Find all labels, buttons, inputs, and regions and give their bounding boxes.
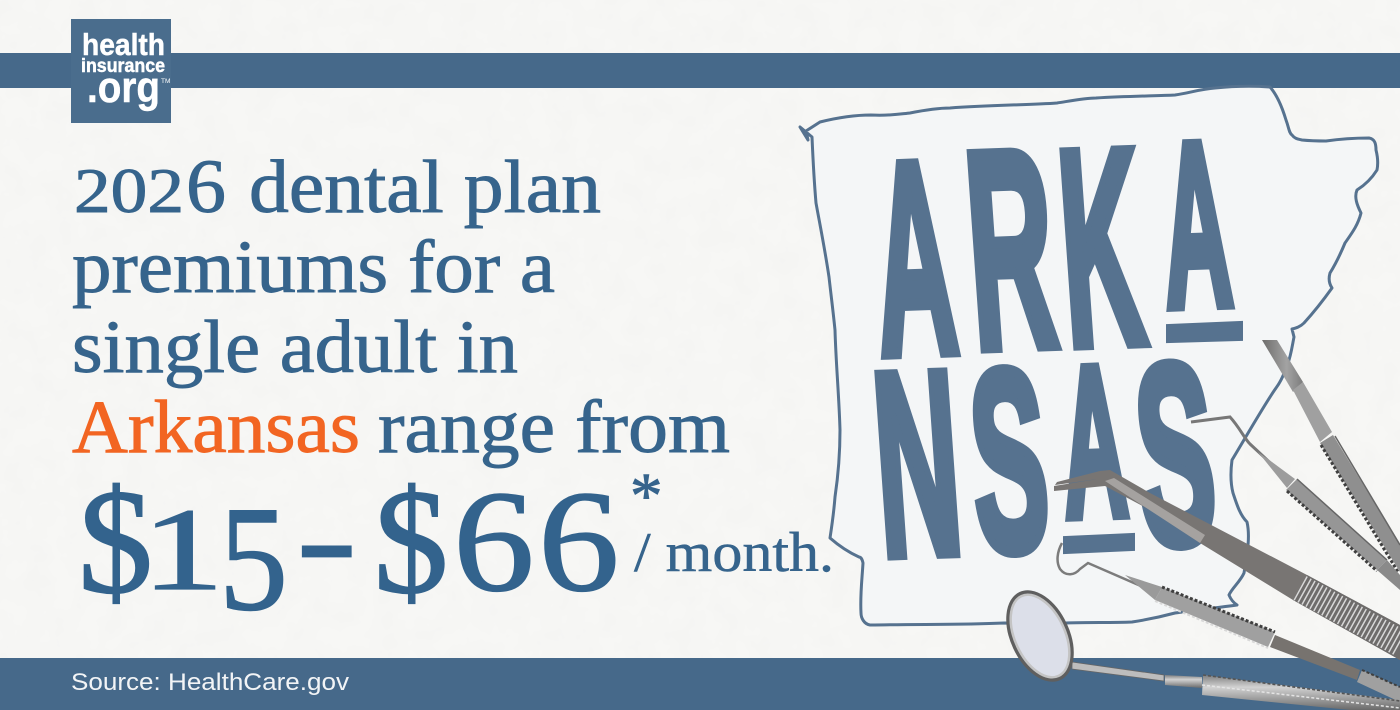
- logo: healthinsurance.org: [71, 19, 171, 123]
- state name lettering: ARKANSAS: A: [1056, 323, 1132, 562]
- price range: $: [374, 459, 448, 625]
- price range: 6: [453, 462, 534, 622]
- state name lettering: ARKANSAS: A: [1156, 93, 1237, 356]
- tool: spatula: [1262, 340, 1400, 572]
- headline: 6: [186, 145, 226, 229]
- price range: –: [302, 419, 352, 641]
- state name lettering: ARKANSAS: K: [1050, 91, 1152, 404]
- price range: $: [78, 459, 153, 625]
- price range: [78, 419, 619, 642]
- tool: dental mirror: [996, 583, 1400, 710]
- price range: 1: [141, 485, 225, 615]
- logo: healthinsurance.org: TM: [161, 78, 170, 85]
- tool: curved probe: [1191, 417, 1400, 590]
- bottom band: [0, 658, 1400, 710]
- headline: Arkansas: [72, 386, 360, 469]
- top band: [0, 53, 1400, 88]
- price range: 5: [219, 477, 288, 642]
- logo: healthinsurance.org: insurance: [81, 55, 165, 77]
- headline: dental plan: [249, 146, 601, 229]
- state name lettering: ARKANSAS: A: [864, 105, 965, 413]
- source line: Source: HealthCare.gov: [71, 669, 349, 696]
- state name lettering: ARKANSAS: S: [962, 317, 1057, 607]
- headline: [72, 145, 730, 469]
- tool: hook probe: [1058, 543, 1400, 702]
- asterisk and per month: [630, 460, 834, 584]
- logo: healthinsurance.org: .org: [87, 63, 160, 112]
- logo: healthinsurance.org: health: [82, 27, 165, 62]
- asterisk and per month: *: [630, 460, 662, 532]
- headline: range from: [378, 386, 730, 469]
- state name lettering: ARKANSAS: [864, 91, 1240, 610]
- dental tools: [996, 340, 1400, 710]
- headline: premiums for a: [72, 226, 555, 309]
- price range: 6: [538, 462, 619, 622]
- tool: tweezers: [1054, 470, 1400, 660]
- state name lettering: ARKANSAS: N: [865, 316, 969, 610]
- headline: single adult in: [72, 306, 518, 389]
- state name lettering: ARKANSAS: R: [957, 91, 1064, 408]
- state name lettering: ARKANSAS: S: [1127, 311, 1224, 599]
- headline: 202: [74, 155, 184, 226]
- asterisk and per month: / month.: [634, 522, 834, 584]
- Arkansas state outline: [800, 86, 1378, 625]
